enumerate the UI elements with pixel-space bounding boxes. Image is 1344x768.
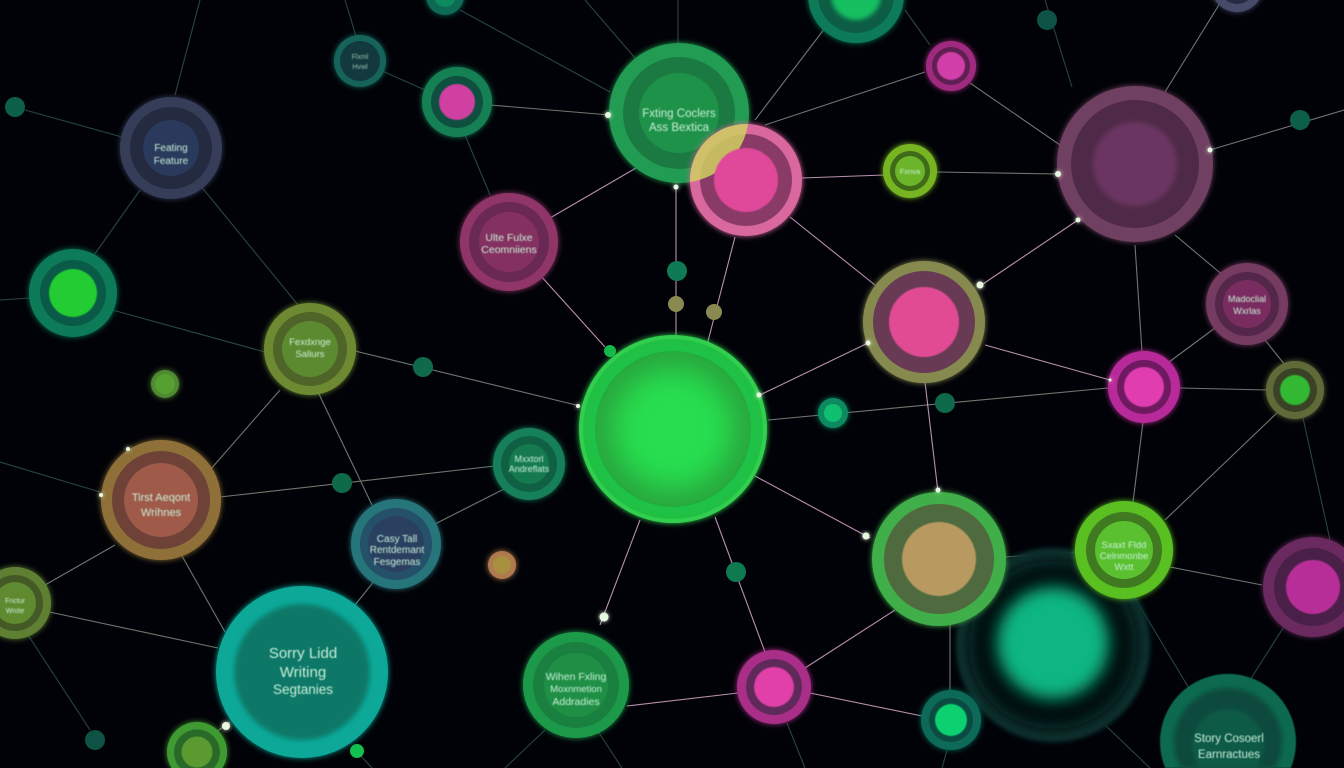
node: Casy Tall: [351, 499, 441, 589]
node: pink with teal ring: [422, 67, 492, 137]
node: Fexdxnge Saliurs: [264, 303, 356, 395]
node: Trust: Wrihnes: [141, 507, 182, 519]
node: Trust: Tirst Aeqont: [132, 492, 190, 504]
junction glints: [99, 112, 1212, 730]
node: center big green: [579, 335, 767, 523]
node: Sorry Lidd Writing Segtanies: Sorry Lidd: [269, 645, 337, 662]
node: top green: [808, 0, 904, 43]
node: olive left edge: [0, 567, 51, 639]
node: magenta right: [1108, 351, 1180, 423]
node: Story Cosoerl: Story Cosoerl: [1194, 733, 1264, 745]
node: Mxxtorl Andreflats: Andreflats: [509, 464, 550, 474]
node: Trust: [101, 440, 221, 560]
node: Casy Tall: Casy Tall: [377, 534, 417, 545]
node: lime Sxaxt Fldd: Celnmonbe: [1100, 551, 1148, 562]
node: Mxxtorl Andreflats: Mxxtorl: [514, 454, 544, 464]
node: Madoclial Wxrlas: [1206, 263, 1288, 345]
node: Feature navy: [120, 97, 222, 199]
node: When Feling: Wihen Fxling: [546, 671, 606, 683]
node: small teal with label: Hvwl: [352, 64, 368, 71]
node: small teal with label: [334, 35, 386, 87]
node: lime Fxnva: Fxnva: [900, 167, 921, 176]
node: lime Sxaxt Fldd: Wxtt: [1114, 562, 1134, 573]
node: top green Fxting Coclers: Ass Bextica: [649, 122, 710, 134]
node: Feature navy: Feating: [154, 143, 188, 154]
node: small green bottom: [167, 722, 227, 768]
node: Fexdxnge Saliurs: Fexdxnge: [289, 337, 331, 348]
node: blurred teal background circle: [956, 548, 1150, 742]
node: top green Fxting Coclers: [609, 43, 749, 183]
node: When Feling: Moxnmetion: [550, 684, 602, 695]
node: pink overlapping: [690, 124, 802, 236]
node: top edge slate: [1211, 0, 1263, 12]
node: Sorry Lidd Writing Segtanies: Segtanies: [273, 682, 333, 697]
node: magenta right edge: [1263, 537, 1344, 637]
node: Casy Tall: Rentdemant: [370, 545, 424, 556]
node: small tan dot: [488, 551, 516, 579]
node: large mauve: [1057, 86, 1213, 242]
node: small teal with label: Flxml: [352, 54, 369, 61]
node: Ulte Fulxe: [460, 193, 558, 291]
node: olive green right: [1266, 361, 1324, 419]
node: Sorry Lidd Writing Segtanies: [216, 586, 388, 758]
node: olive left edge: Wrote: [6, 608, 24, 615]
node: Mxxtorl Andreflats: [493, 428, 565, 500]
node: Ulte Fulxe: Ceomniiens: [481, 244, 537, 256]
node: small green mid: [818, 398, 848, 428]
node: Casy Tall: Fesgemas: [374, 557, 420, 568]
node: pink bottom: [737, 650, 811, 724]
node: small magenta top: [926, 41, 976, 91]
node: Madoclial Wxrlas: Wxrlas: [1233, 306, 1261, 316]
node: lime Sxaxt Fldd: [1075, 501, 1173, 599]
node: pink with olive ring: [863, 261, 985, 383]
node: olive left edge: Fnctur: [5, 598, 26, 605]
node: lime Sxaxt Fldd: Sxaxt Fldd: [1102, 540, 1146, 551]
node: tan with green ring: [872, 492, 1006, 626]
node: lime Fxnva: [883, 144, 937, 198]
node: small olive dot: [151, 370, 179, 398]
node: When Feling: Addradies: [552, 696, 600, 708]
node: Sorry Lidd Writing Segtanies: Writing: [280, 664, 326, 681]
node: Ulte Fulxe: Ulte Fulxe: [485, 232, 533, 244]
node: top edge teal: [426, 0, 464, 15]
node: top green Fxting Coclers: Fxting Coclers: [642, 108, 716, 120]
node: small green bottom right: [921, 690, 981, 750]
node: Story Cosoerl: [1160, 674, 1296, 768]
node: Story Cosoerl: Earnractues: [1198, 749, 1260, 761]
node: Madoclial Wxrlas: Madoclial: [1228, 294, 1266, 304]
node: Feature navy: Feature: [154, 156, 189, 167]
node: green left: [29, 249, 117, 337]
node: When Feling: [523, 632, 629, 738]
node: Fexdxnge Saliurs: Saliurs: [295, 349, 325, 360]
